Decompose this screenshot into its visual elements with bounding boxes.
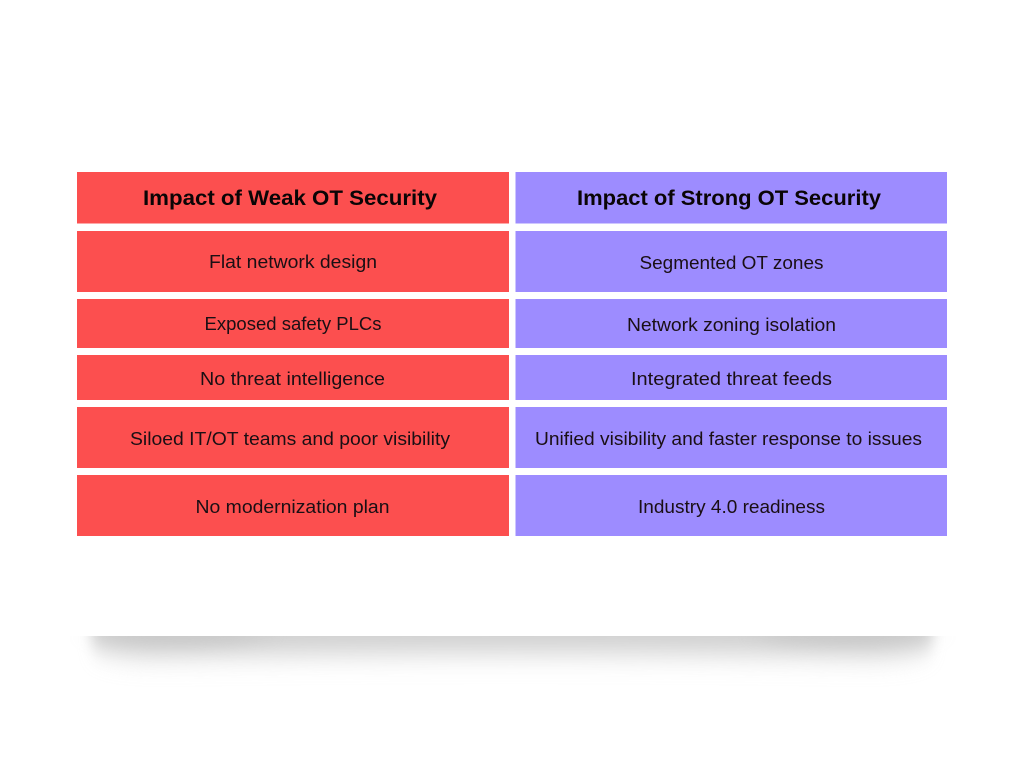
- row 4 weak: Siloed IT/OT teams and poor visibility: [130, 429, 450, 449]
- row 1 weak: [77, 231, 509, 292]
- row 3 weak: No threat intelligence: [200, 369, 385, 389]
- row 3 weak: [77, 355, 509, 400]
- header: strong OT security: Impact of Strong OT Security: [577, 187, 881, 210]
- header: weak OT security: [77, 172, 509, 224]
- row 4 strong: [516, 407, 947, 468]
- row 3 strong: [516, 355, 947, 400]
- row 2 strong: [516, 299, 947, 348]
- row 4 weak: [77, 407, 509, 468]
- header: strong OT security: [516, 172, 947, 224]
- row 1 strong: [516, 231, 947, 292]
- table shadow: [86, 636, 940, 668]
- row 5 weak: [77, 475, 509, 536]
- row 3 strong: Integrated threat feeds: [631, 369, 832, 389]
- row 1 strong: Segmented OT zones: [640, 253, 824, 273]
- row 2 weak: [77, 299, 509, 348]
- row 2 weak: Exposed safety PLCs: [204, 314, 382, 334]
- header: weak OT security: Impact of Weak OT Security: [143, 187, 437, 210]
- row 5 strong: [516, 475, 947, 536]
- row 5 strong: Industry 4.0 readiness: [638, 497, 825, 517]
- row 1 weak: Flat network design: [209, 252, 377, 272]
- row 5 weak: No modernization plan: [196, 497, 390, 517]
- comparison table: [77, 172, 947, 536]
- row 4 strong: Unified visibility and faster response to issues: [535, 429, 922, 449]
- row 2 strong: Network zoning isolation: [627, 315, 836, 335]
